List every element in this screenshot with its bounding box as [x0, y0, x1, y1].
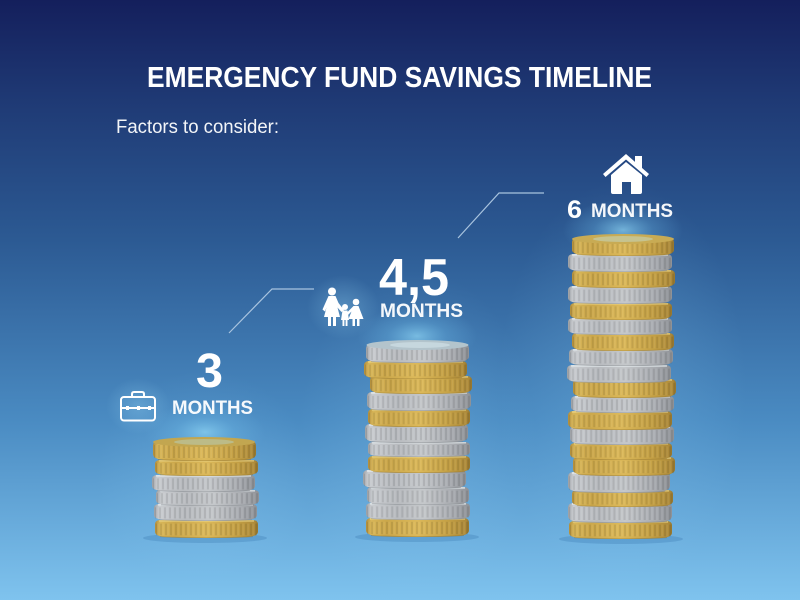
connector arrow: 3 to 4,5 months	[229, 289, 314, 333]
number: 4,5: 4,5	[379, 249, 449, 307]
icon: briefcase	[121, 392, 155, 420]
coin stack: 3 months	[152, 437, 259, 538]
number: 6: 6	[567, 196, 582, 224]
label: months: MONTHS	[172, 398, 253, 419]
glow behind stacks	[95, 180, 747, 600]
subtitle: factors to consider: Factors to consider:	[116, 117, 279, 138]
icon: family	[322, 288, 364, 326]
coin stack: 4,5 months	[363, 340, 472, 537]
number: 3: 3	[196, 345, 223, 398]
label: months: MONTHS	[380, 301, 463, 322]
panel: 6 months	[567, 154, 676, 539]
icon: house	[603, 154, 649, 194]
panel: 4,5 months	[322, 249, 472, 537]
label: months: MONTHS	[591, 201, 673, 222]
title: EMERGENCY FUND SAVINGS TIMELINE	[147, 62, 652, 94]
coin stack: 6 months	[567, 234, 676, 539]
connector arrow: 4,5 to 6 months	[458, 193, 544, 238]
panel: 3 months	[121, 345, 259, 538]
